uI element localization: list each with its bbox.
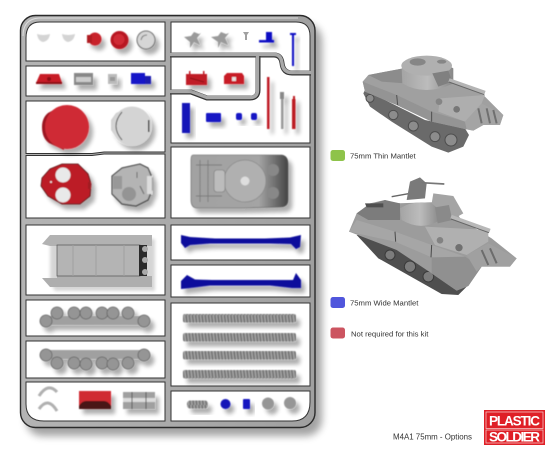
part: blue sponson upper — [181, 235, 301, 249]
part: grey drum — [123, 392, 155, 409]
part: grey turret shell — [112, 164, 152, 206]
part: blue bracket — [259, 32, 274, 42]
part: grey block — [74, 73, 93, 85]
part: grey cap — [136, 30, 156, 50]
part: curved grey strips — [39, 388, 57, 411]
part: star brackets — [184, 32, 229, 48]
part: blue block — [206, 113, 221, 122]
part: blue disc — [220, 399, 230, 409]
part: blue cylinder — [243, 399, 250, 409]
part: white cups — [37, 34, 75, 42]
part: thin blue rod — [290, 33, 296, 66]
sprue runners — [170, 54, 311, 98]
part: grey hatch — [111, 106, 152, 146]
panel: left column compartments — [26, 22, 165, 421]
legend: wide mantlet — [330, 297, 419, 308]
part: track runs — [183, 314, 296, 378]
legend: thin mantlet: 75mm Thin Mantlet — [350, 152, 417, 160]
legend: thin mantlet — [330, 150, 417, 161]
part: upper hull — [191, 155, 288, 208]
part: blue sponson lower — [181, 273, 301, 289]
part: red hatch — [42, 105, 89, 150]
part: red turret shell — [41, 164, 91, 204]
part: small grey block — [108, 74, 117, 84]
logo: Plastic Soldier: SOLDIER — [489, 430, 540, 444]
logo: Plastic Soldier: PLASTIC — [489, 414, 540, 428]
part: small grey wheels — [262, 397, 296, 410]
caption: M4A1 75mm - Options — [393, 432, 472, 442]
part: blue long block — [182, 103, 190, 133]
panel: right column compartments — [171, 22, 310, 421]
part: red box right — [224, 73, 244, 84]
part: short track — [187, 400, 208, 408]
part: small T piece — [243, 32, 249, 40]
tank: wide mantlet — [349, 177, 517, 295]
logo: Plastic Soldier — [484, 410, 545, 445]
part: road wheels upper — [40, 307, 150, 327]
part: small blue pieces — [236, 113, 257, 120]
tank: thin mantlet — [363, 56, 503, 153]
part: red box left — [186, 71, 207, 85]
part: red bracket — [36, 74, 62, 84]
part: red transmission — [79, 391, 111, 409]
part: large red cap — [110, 31, 128, 49]
legend: wide mantlet: 75mm Wide Mantlet — [350, 298, 419, 308]
part: lower hull tub — [42, 235, 155, 291]
part: small red cap — [87, 32, 102, 46]
part: road wheels lower — [40, 349, 150, 370]
part: blue block — [131, 73, 151, 84]
legend: not required — [330, 328, 429, 338]
legend: not required: Not required for this kit — [351, 330, 429, 338]
part: vertical rods — [267, 77, 296, 129]
sprue frame — [20, 16, 322, 436]
